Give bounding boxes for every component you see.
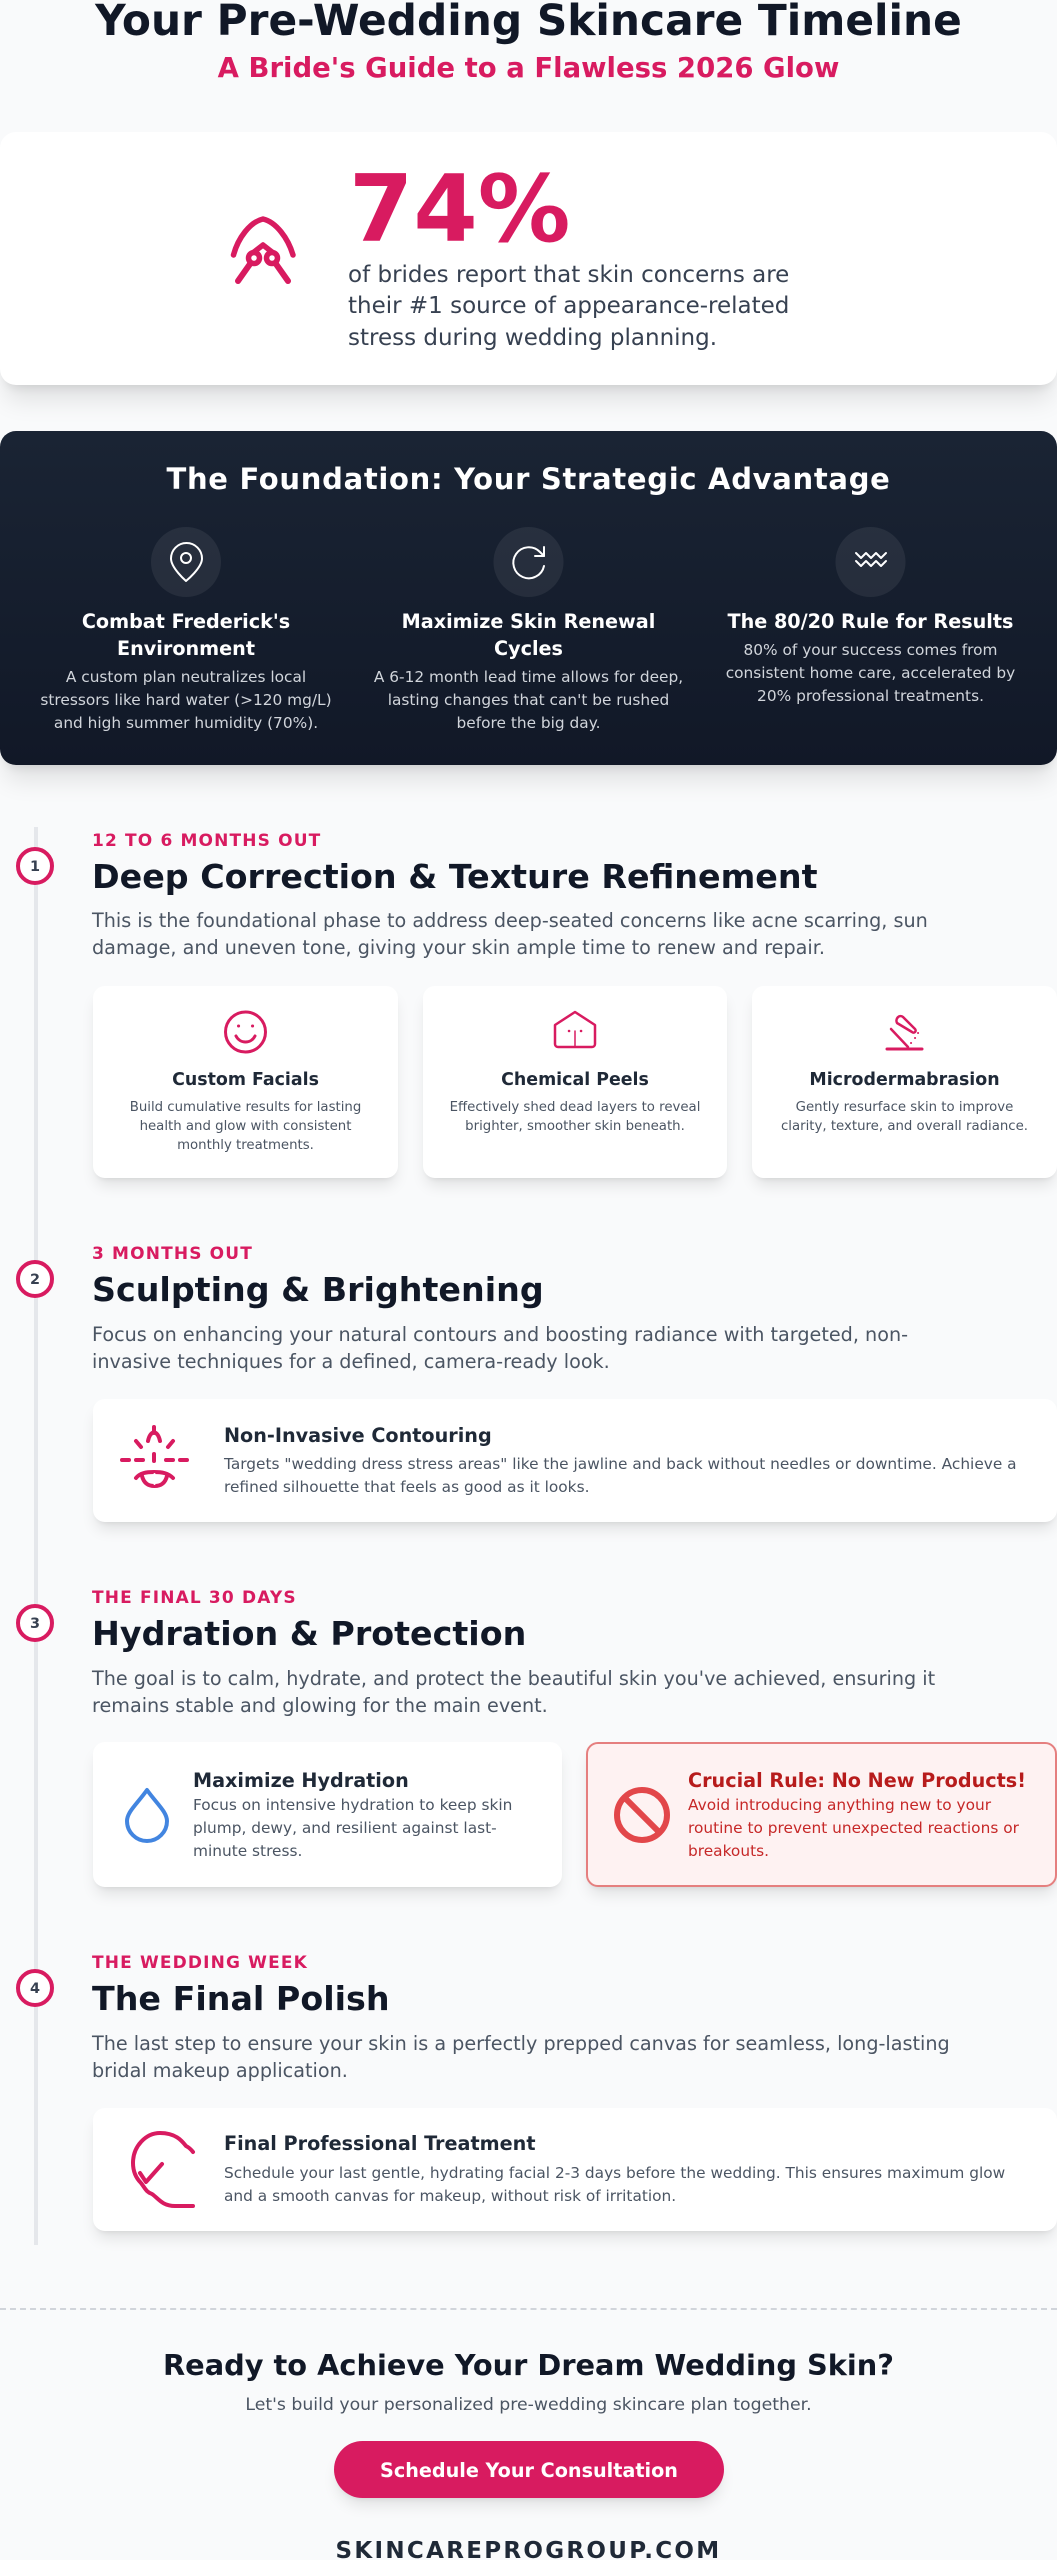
description: damage, and uneven tone, giving your skin ample time to renew and repair.: [92, 936, 825, 959]
card: final professional treatment: Final Professional Treatment: [224, 2132, 536, 2155]
card: chemical peels: [423, 986, 727, 1178]
subtitle: A Bride's Guide to a Flawless 2026 Glow: [218, 52, 839, 84]
description: Focus on enhancing your natural contours and boosting radiance with targeted, non-: [92, 1323, 908, 1346]
card: maximize hydration: minute stress.: [193, 1842, 302, 1860]
eyebrow: THE FINAL 30 DAYS: [92, 1588, 297, 1608]
foundation column: 80/20 rule: [726, 527, 1015, 705]
foundation column: environment: [40, 527, 332, 732]
card: crucial rule: breakouts.: [688, 1842, 769, 1860]
foundation column: renewal: A 6-12 month lead time allows for deep,: [374, 668, 683, 686]
foundation column: environment: Combat Frederick's: [82, 610, 290, 633]
card: custom facials: Build cumulative results for lasting: [130, 1100, 361, 1115]
icon: refresh: [494, 527, 564, 597]
eyebrow: THE WEDDING WEEK: [92, 1953, 308, 1973]
icon: smile: [226, 1012, 266, 1052]
card: non-invasive contouring: [93, 1399, 1057, 1522]
stat description: of brides report that skin concerns are: [348, 262, 789, 288]
foundation column: renewal: before the big day.: [456, 714, 600, 732]
foundation heading: The Foundation: Your Strategic Advantage: [166, 462, 891, 496]
card: chemical peels: Effectively shed dead layers to reveal: [450, 1100, 700, 1115]
panel: the foundation: [0, 431, 1057, 765]
description: [91, 909, 928, 959]
icon: location pin: [151, 527, 221, 597]
icon: skin check: [133, 2133, 193, 2206]
marker: step 1: [16, 847, 54, 885]
card: microdermabrasion: Gently resurface skin to improve: [796, 1100, 1013, 1115]
card: crucial rule: routine to prevent unexpected reactions or: [688, 1819, 1020, 1837]
icon: abrasion tool: [887, 1016, 922, 1049]
card: custom facials: health and glow with consistent: [140, 1119, 351, 1134]
card: final professional treatment: Schedule your last gentle, hydrating facial 2-3 days before the wedding. This ensures maximum glow: [224, 2164, 1005, 2182]
icon: prohibited: [617, 1790, 667, 1840]
section 2 heading: [92, 1244, 908, 1373]
description: remains stable and glowing for the main event.: [92, 1694, 548, 1717]
card: non-invasive contouring: refined silhouette that feels as good as it looks.: [224, 1478, 589, 1496]
card: crucial rule: Avoid introducing anything new to your: [688, 1796, 992, 1814]
footer divider: [0, 2308, 1057, 2310]
header: [94, 0, 962, 84]
card: chemical peels: brighter, smoother skin beneath.: [465, 1119, 685, 1134]
foundation column: environment: A custom plan neutralizes local: [66, 668, 306, 686]
foundation column: renewal: lasting changes that can't be rushed: [388, 691, 669, 709]
description: The last step to ensure your skin is a perfectly prepped canvas for seamless, long-lasting: [91, 2032, 950, 2055]
cta button: [334, 2441, 724, 2498]
foundation column: renewal: [374, 527, 683, 732]
section 3 heading: [91, 1588, 936, 1717]
icon: peel: [555, 1012, 595, 1047]
cta heading: Ready to Achieve Your Dream Wedding Skin?: [163, 2348, 894, 2382]
foundation column: 80/20 rule: 20% professional treatments.: [757, 687, 984, 705]
stat number: 74%: [349, 155, 570, 263]
marker: step 2: [16, 1260, 54, 1298]
card: microdermabrasion: clarity, texture, and overall radiance.: [781, 1119, 1028, 1134]
section 1 heading: [91, 831, 928, 959]
icon: water drop: [127, 1790, 167, 1841]
heading: Sculpting & Brightening: [92, 1270, 544, 1309]
card: custom facials: Custom Facials: [172, 1070, 319, 1090]
marker: step 1: 1: [30, 859, 40, 875]
card: final professional treatment: [93, 2108, 1057, 2231]
foundation column: 80/20 rule: consistent home care, accelerated by: [726, 664, 1015, 682]
foundation column: renewal: Cycles: [494, 637, 563, 660]
card: microdermabrasion: [752, 986, 1057, 1178]
card: crucial rule: [586, 1742, 1057, 1887]
card: custom facials: monthly treatments.: [177, 1138, 314, 1153]
marker: step 3: 3: [30, 1616, 40, 1632]
stat description: their #1 source of appearance-related: [348, 293, 789, 319]
marker: step 2: 2: [30, 1272, 40, 1288]
card: maximize hydration: Maximize Hydration: [193, 1769, 409, 1792]
stat description: stress during wedding planning.: [348, 325, 717, 351]
marker: step 3: [16, 1604, 54, 1642]
card: final professional treatment: and a smooth canvas for makeup, without risk of irritation.: [224, 2187, 676, 2205]
icon: waves: [836, 527, 906, 597]
description: [92, 1323, 908, 1373]
description: This is the foundational phase to address deep-seated concerns like acne scarring, sun: [91, 909, 928, 932]
foundation column: renewal: Maximize Skin Renewal: [402, 610, 655, 633]
icon: bride veil: [234, 219, 293, 281]
section 4 heading: [91, 1953, 950, 2082]
card: maximize hydration: plump, dewy, and resilient against last-: [193, 1819, 497, 1837]
stat description: [348, 262, 789, 351]
icon: contouring: [122, 1427, 187, 1486]
card: custom facials: [93, 986, 398, 1178]
card: chemical peels: Chemical Peels: [501, 1070, 649, 1090]
eyebrow: 12 TO 6 MONTHS OUT: [92, 831, 321, 851]
card: non-invasive contouring: Non-Invasive Contouring: [224, 1424, 492, 1447]
cta button: Schedule Your Consultation: [380, 2459, 678, 2482]
card: maximize hydration: Focus on intensive hydration to keep skin: [193, 1796, 512, 1814]
heading: Deep Correction & Texture Refinement: [92, 857, 818, 896]
heading: Hydration & Protection: [92, 1614, 526, 1653]
call to action: [163, 2348, 894, 2560]
description: bridal makeup application.: [92, 2059, 348, 2082]
description: [91, 2032, 950, 2082]
eyebrow: 3 MONTHS OUT: [92, 1244, 253, 1264]
foundation column: 80/20 rule: The 80/20 Rule for Results: [728, 610, 1013, 633]
description: The goal is to calm, hydrate, and protect the beautiful skin you've achieved, ensuring it: [91, 1667, 936, 1690]
description: invasive techniques for a defined, camera-ready look.: [92, 1350, 610, 1373]
description: [91, 1667, 936, 1717]
foundation column: environment: and high summer humidity (70%).: [54, 714, 318, 732]
panel: 74% statistic: [0, 132, 1057, 385]
timeline vertical line: [34, 827, 38, 2245]
foundation column: 80/20 rule: 80% of your success comes from: [744, 641, 997, 659]
card: non-invasive contouring: Targets "wedding dress stress areas" like the jawline and back without needles or downtime. Achieve a: [223, 1455, 1017, 1473]
foundation column: environment: stressors like hard water (>120 mg/L): [40, 691, 332, 709]
card: maximize hydration: [93, 1742, 562, 1887]
marker: step 4: [16, 1969, 54, 2007]
heading: The Final Polish: [92, 1979, 390, 2018]
cta text: Let's build your personalized pre-wedding skincare plan together.: [245, 2395, 812, 2415]
marker: step 4: 4: [30, 1981, 40, 1997]
card: crucial rule: Crucial Rule: No New Products!: [688, 1769, 1026, 1792]
card: microdermabrasion: Microdermabrasion: [809, 1070, 1000, 1090]
foundation column: environment: Environment: [117, 637, 255, 660]
